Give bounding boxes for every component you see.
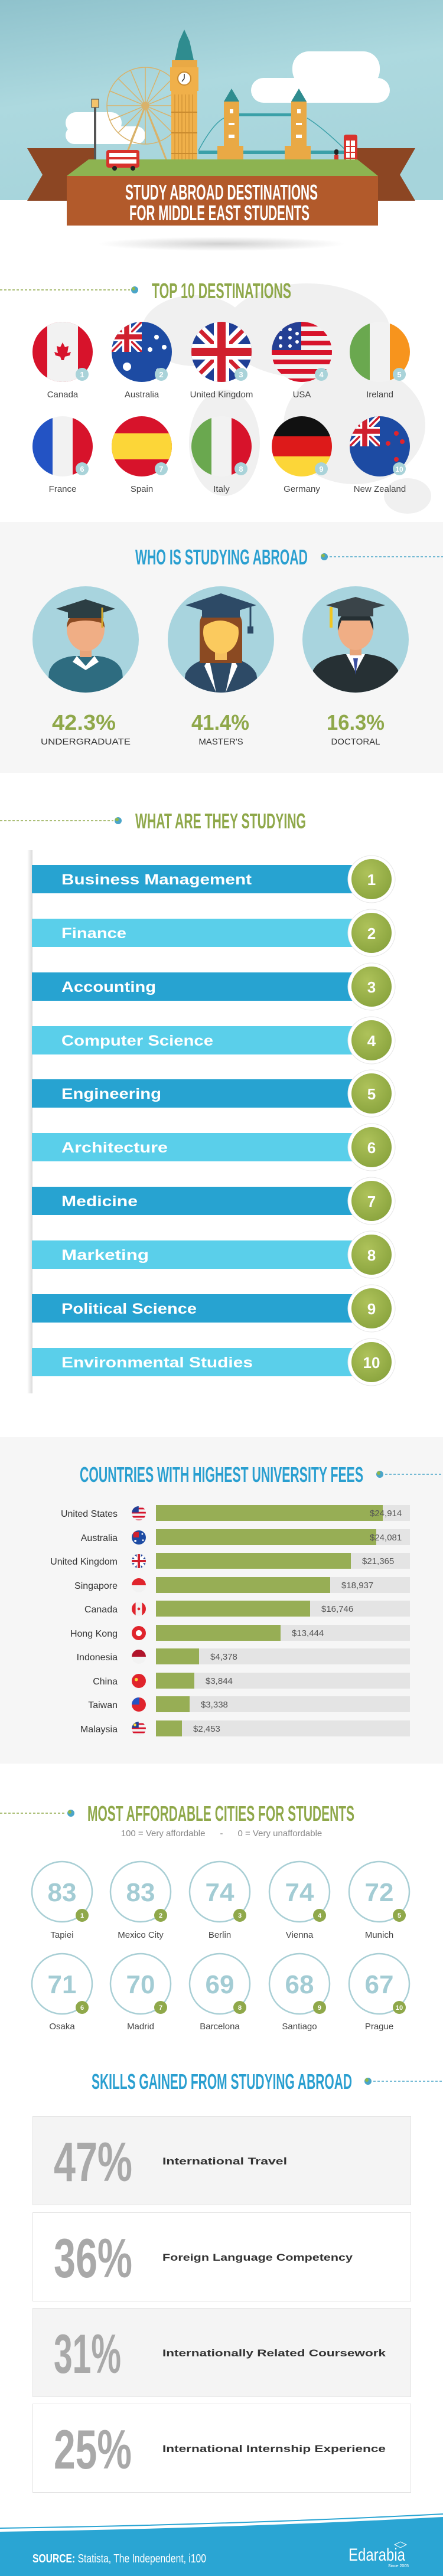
header: sky background xyxy=(0,0,443,200)
city circles: Barcelona xyxy=(200,2022,240,2032)
skill 2: 36% xyxy=(54,2227,132,2289)
skill 4: International Internship Experience xyxy=(162,2443,386,2454)
skill 1: 47% xyxy=(54,2131,132,2193)
stat: masters: 41.4% xyxy=(191,710,249,734)
flag labels: Canada xyxy=(47,390,79,400)
bar chart: Indonesia xyxy=(77,1653,118,1663)
skill 2 xyxy=(33,2213,411,2301)
lamp xyxy=(92,99,99,159)
avatar: doctoral xyxy=(302,586,409,693)
flag: italy: 8 xyxy=(239,465,243,474)
bar chart: $3,338 xyxy=(201,1700,228,1710)
bar 10: Environmental Studies xyxy=(61,1354,253,1371)
city circles: 68 xyxy=(285,1970,314,1999)
bar 9: 9 xyxy=(367,1300,376,1318)
bar 3 xyxy=(32,963,395,1010)
heading: what are they studying: WHAT ARE THEY STUDYING xyxy=(135,809,306,833)
city circles: Tapiei xyxy=(50,1930,74,1940)
bar 7: 7 xyxy=(367,1193,376,1210)
bar 9: Political Science xyxy=(61,1301,197,1317)
stat: doctoral xyxy=(327,710,385,747)
city circles: 2 xyxy=(159,1912,162,1919)
flag: uk: 3 xyxy=(239,370,243,379)
footer xyxy=(0,2514,443,2576)
city circles: 70 xyxy=(126,1970,155,1999)
bar chart: Canada xyxy=(84,1605,118,1615)
city circles: Vienna xyxy=(286,1930,314,1940)
tower right xyxy=(285,89,311,159)
bar chart: Taiwan xyxy=(88,1700,118,1710)
bar chart: $24,081 xyxy=(370,1533,402,1543)
bar chart: $2,453 xyxy=(193,1724,220,1734)
skill 1 xyxy=(33,2116,411,2205)
bar chart: $16,746 xyxy=(321,1604,353,1614)
flag: ireland xyxy=(350,322,410,382)
bar 6: Architecture xyxy=(61,1140,168,1156)
bar chart: Hong Kong xyxy=(70,1629,118,1639)
city circles xyxy=(32,1862,409,2032)
city circles: 83 xyxy=(48,1878,76,1907)
bar chart: $13,444 xyxy=(292,1628,324,1638)
bar 3: Accounting xyxy=(61,979,156,995)
city circles: 10 xyxy=(396,2004,403,2012)
flag: usa: 4 xyxy=(319,370,324,379)
footer: SOURCE: Statista, The Independent, i100 xyxy=(32,2552,206,2565)
flag: italy xyxy=(191,416,252,476)
stat: undergraduate: UNDERGRADUATE xyxy=(41,737,131,747)
cloud right xyxy=(251,51,390,103)
flag: canada xyxy=(32,322,93,382)
flag labels: USA xyxy=(293,390,311,400)
city circles: Prague xyxy=(365,2022,393,2032)
flag: new zealand xyxy=(350,416,410,476)
bar 6: 6 xyxy=(367,1139,376,1157)
flag: germany: 9 xyxy=(319,465,324,474)
bar 7: Medicine xyxy=(61,1193,138,1210)
bar 4: Computer Science xyxy=(61,1033,213,1049)
bar chart: $18,937 xyxy=(341,1581,373,1591)
bar chart: United Kingdom xyxy=(50,1557,118,1567)
skill 4 xyxy=(33,2404,411,2493)
bar 8: 8 xyxy=(367,1246,376,1264)
bar chart: Singapore xyxy=(74,1581,118,1591)
flag labels: Ireland xyxy=(366,390,393,400)
city circles: 1 xyxy=(80,1912,84,1919)
skill 3: 31% xyxy=(54,2323,121,2385)
city circles: 7 xyxy=(159,2004,162,2012)
flag labels: Australia xyxy=(125,390,159,400)
city circles: 5 xyxy=(398,1912,401,1919)
bar chart: $3,844 xyxy=(206,1676,233,1686)
skill 3: Internationally Related Coursework xyxy=(162,2348,386,2359)
city circles: Santiago xyxy=(282,2022,317,2032)
flag: canada: 1 xyxy=(80,370,84,379)
flag: ireland: 5 xyxy=(397,370,402,379)
flag: new zealand: 10 xyxy=(395,465,403,474)
logo: edarabia: Since 2005 xyxy=(388,2564,409,2568)
city circles: Mexico City xyxy=(118,1930,164,1940)
stat: undergraduate: 42.3% xyxy=(52,710,116,734)
city circles: 67 xyxy=(365,1970,393,1999)
skill 3 xyxy=(33,2309,411,2397)
bar chart: China xyxy=(93,1677,118,1687)
logo: edarabia xyxy=(348,2542,409,2568)
flag labels: France xyxy=(49,484,76,494)
city circles: 8 xyxy=(238,2004,242,2012)
bus xyxy=(106,150,139,171)
skill 2: Foreign Language Competency xyxy=(162,2252,353,2263)
stat: undergraduate xyxy=(41,710,131,747)
bar 2 xyxy=(32,909,395,956)
bar 6 xyxy=(32,1124,395,1171)
bar 10 xyxy=(32,1338,395,1386)
flag: australia: 2 xyxy=(159,370,164,379)
landmarks xyxy=(92,30,357,177)
bar 5: 5 xyxy=(367,1085,376,1103)
guard xyxy=(334,149,338,168)
heading: most affordable cities xyxy=(0,1801,354,1839)
city circles: 74 xyxy=(285,1878,314,1907)
panel: who is studying abroad xyxy=(0,522,443,773)
phone box xyxy=(344,135,357,170)
flag: france xyxy=(32,416,93,476)
stat: masters: MASTER'S xyxy=(198,737,243,747)
study list xyxy=(27,850,395,1393)
city circles: Berlin xyxy=(209,1930,231,1940)
flag: spain xyxy=(112,416,172,476)
avatar: masters xyxy=(168,586,274,693)
bar chart: $21,365 xyxy=(362,1556,394,1566)
city circles: 71 xyxy=(48,1970,76,1999)
flag labels: Italy xyxy=(213,484,230,494)
bar 2: Finance xyxy=(61,925,126,942)
city circles: 3 xyxy=(238,1912,242,1919)
bar chart: Australia xyxy=(81,1533,118,1543)
flag: australia xyxy=(112,322,172,382)
heading: what are they studying xyxy=(0,809,306,833)
bar 4 xyxy=(32,1017,395,1064)
flag: usa xyxy=(272,322,332,383)
bar 9 xyxy=(32,1285,395,1332)
bar 8 xyxy=(32,1231,395,1278)
flag: uk xyxy=(191,322,252,382)
stat: doctoral: DOCTORAL xyxy=(331,737,380,747)
avatar: undergraduate xyxy=(32,586,139,693)
stat: masters xyxy=(191,710,249,747)
bar 2: 2 xyxy=(367,925,376,942)
flag labels: United Kingdom xyxy=(190,390,253,400)
bar 8: Marketing xyxy=(61,1247,149,1263)
flag: germany xyxy=(272,416,332,476)
bar chart: United States xyxy=(61,1509,118,1519)
flag labels xyxy=(47,390,406,494)
bar 3: 3 xyxy=(367,978,376,996)
heading: top 10 destinations xyxy=(0,279,291,303)
bar 5 xyxy=(32,1070,395,1117)
ribbon tails xyxy=(27,148,415,201)
city circles: Osaka xyxy=(49,2022,75,2032)
title banner xyxy=(67,176,378,226)
city circles: 4 xyxy=(318,1912,322,1919)
heading: most affordable cities: 100 = Very affordable - 0 = Very unaffordable xyxy=(121,1829,322,1839)
bridge xyxy=(198,113,346,154)
bar 7 xyxy=(32,1177,395,1225)
bar chart xyxy=(50,1505,410,1736)
bar chart: $4,378 xyxy=(210,1652,237,1662)
city circles: 69 xyxy=(206,1970,234,1999)
heading: WHO IS STUDYING ABROAD xyxy=(135,545,308,569)
city circles: 9 xyxy=(318,2004,321,2012)
city circles: 83 xyxy=(126,1878,155,1907)
tower left xyxy=(217,89,243,159)
bar 4: 4 xyxy=(367,1032,376,1050)
city circles: 74 xyxy=(206,1878,234,1907)
stat: doctoral: 16.3% xyxy=(327,710,385,734)
logo: edarabia: Edarabia xyxy=(348,2545,405,2565)
skill 1: International Travel xyxy=(162,2156,287,2167)
bar chart: $24,914 xyxy=(370,1509,402,1519)
small flags xyxy=(132,1506,146,1736)
city circles: 6 xyxy=(80,2004,84,2012)
big ben xyxy=(170,30,198,177)
skill 4: 25% xyxy=(54,2418,132,2480)
bar 5: Engineering xyxy=(61,1086,161,1102)
bar 1 xyxy=(32,856,395,903)
flag labels: Germany xyxy=(284,484,320,494)
flag: spain: 7 xyxy=(159,465,164,474)
heading: top 10 destinations: TOP 10 DESTINATIONS xyxy=(152,279,291,303)
bar 10: 10 xyxy=(363,1354,380,1372)
title banner: FOR MIDDLE EAST STUDENTS xyxy=(129,201,310,225)
ferris wheel xyxy=(107,67,184,161)
flag: france: 6 xyxy=(80,465,84,474)
city circles: 72 xyxy=(365,1878,393,1907)
flag labels: Spain xyxy=(131,484,153,494)
city circles: Madrid xyxy=(127,2022,154,2032)
flag labels: New Zealand xyxy=(354,484,406,494)
bar 1: 1 xyxy=(367,871,376,889)
bar 1: Business Management xyxy=(61,871,252,888)
panel: highest university fees xyxy=(0,1437,443,1764)
cloud left xyxy=(66,112,145,144)
world map background xyxy=(142,283,431,514)
city circles: Munich xyxy=(365,1930,393,1940)
bar chart: Malaysia xyxy=(80,1725,118,1735)
ground xyxy=(67,159,378,176)
